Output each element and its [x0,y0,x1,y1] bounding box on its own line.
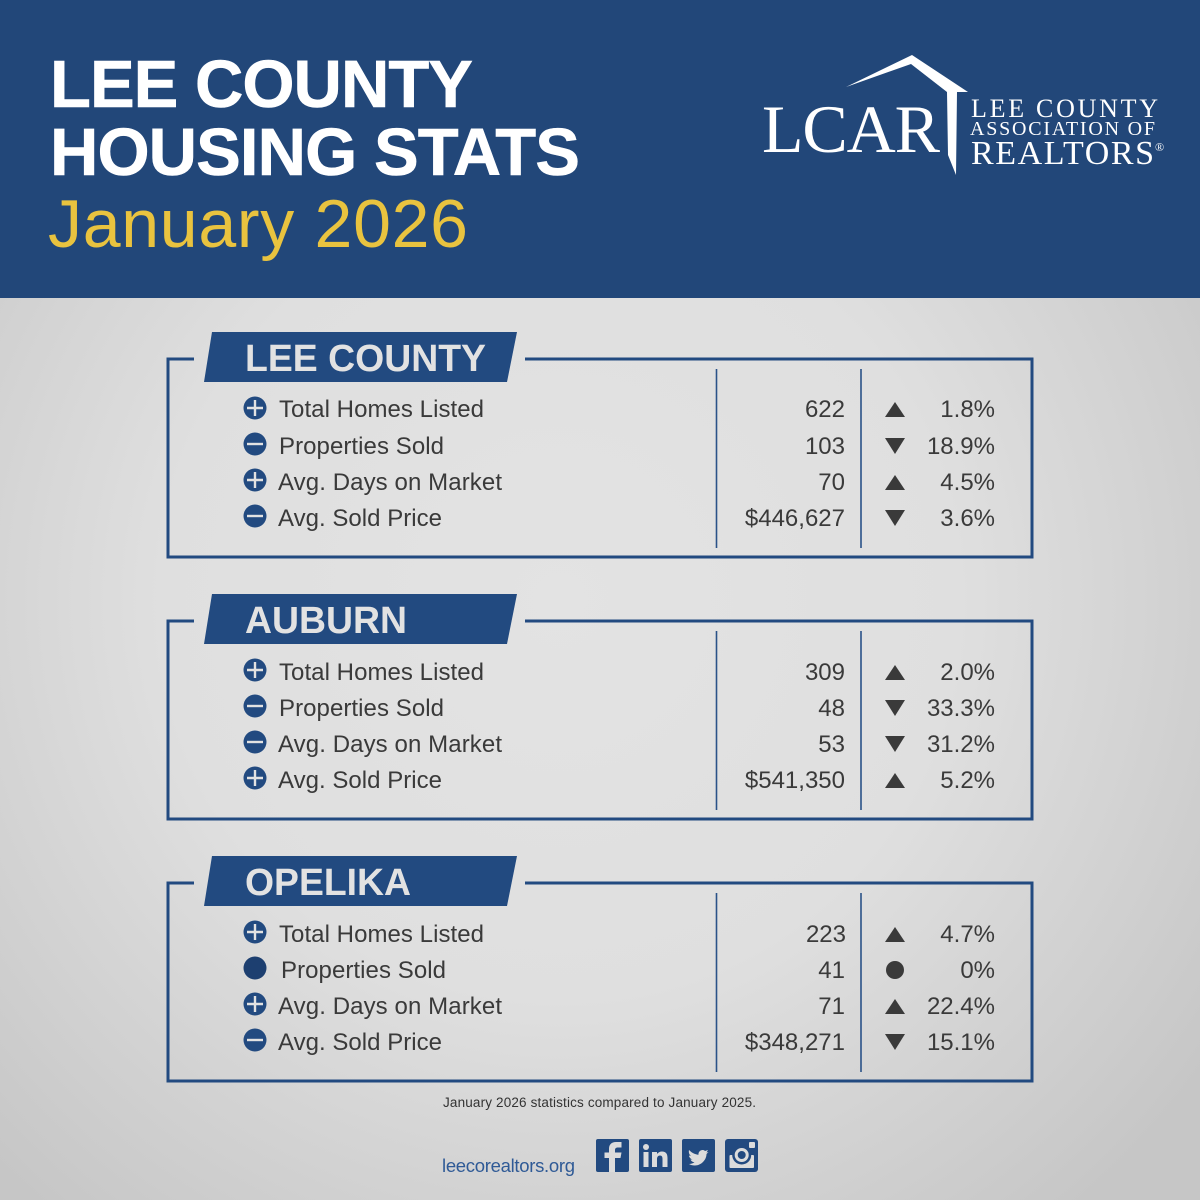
row: Total Homes Listed: 4.7% [940,921,995,948]
row: Properties Sold: Properties Sold [281,957,446,984]
heading: Lee County [204,332,517,382]
row: Properties Sold: Properties Sold [279,695,444,722]
icon: Facebook [596,1139,629,1172]
logo: LCAR: LEE COUNTY [971,94,1158,123]
heading: Lee County: LEE COUNTY [245,338,486,380]
logo: LCAR [762,55,1164,175]
row: Avg. Sold Price: $446,627 [745,505,845,532]
row: Total Homes Listed: 223 [806,921,846,948]
row: Avg. Sold Price: Avg. Sold Price [278,505,442,532]
logo: LCAR: ® [1155,140,1164,154]
row: Properties Sold: 103 [805,433,845,460]
heading: Opelika [204,856,517,906]
row: Total Homes Listed: 1.8% [940,396,995,423]
row: Avg. Sold Price: 15.1% [927,1029,995,1056]
row: Avg. Days on Market [244,730,995,758]
heading: Auburn: AUBURN [245,600,407,642]
row: Avg. Sold Price: 3.6% [940,505,995,532]
logo: LCAR: LCAR [762,91,941,167]
row: Avg. Days on Market [244,992,995,1020]
row: Avg. Days on Market: 31.2% [927,731,995,758]
row: Avg. Sold Price [244,1028,995,1056]
row: Total Homes Listed: Total Homes Listed [279,659,484,686]
heading: Opelika: OPELIKA [245,862,411,904]
icon: Twitter [682,1139,715,1172]
row: Properties Sold [244,694,995,722]
title: HOUSING STATS [50,115,580,190]
row: Total Homes Listed [244,920,995,948]
row: Avg. Days on Market: 22.4% [927,993,995,1020]
row: Total Homes Listed: Total Homes Listed [279,396,484,423]
row: Avg. Days on Market: 53 [818,731,845,758]
row: Total Homes Listed: 622 [805,396,845,423]
panel: Lee County [168,332,1032,557]
row: Avg. Days on Market: 70 [818,469,845,496]
title [48,47,580,262]
row: Properties Sold: 0% [960,957,995,984]
website link: leecorealtors.org [442,1155,575,1176]
title: January 2026 [48,186,468,262]
header band [0,0,1200,298]
icon: LinkedIn [639,1139,672,1172]
row: Avg. Days on Market: Avg. Days on Market [278,469,502,496]
row: Properties Sold: 48 [818,695,845,722]
row: Properties Sold: 41 [818,957,845,984]
panel: Opelika [168,856,1032,1081]
row: Avg. Days on Market: Avg. Days on Market [278,993,502,1020]
row: Total Homes Listed [244,396,995,423]
row: Avg. Sold Price: $348,271 [745,1029,845,1056]
row: Avg. Sold Price [244,504,995,532]
icon: Instagram [725,1139,758,1172]
row: Properties Sold: 33.3% [927,695,995,722]
row: Avg. Sold Price [244,766,995,794]
row: Avg. Sold Price: 5.2% [940,767,995,794]
row: Avg. Sold Price: Avg. Sold Price [278,1029,442,1056]
row: Total Homes Listed: 2.0% [940,659,995,686]
row: Total Homes Listed: 309 [805,659,845,686]
heading: Auburn [204,594,517,644]
row: Properties Sold [244,432,995,460]
footnote: January 2026 statistics compared to January 2025. [443,1095,756,1110]
row: Avg. Sold Price: Avg. Sold Price [278,767,442,794]
row: Total Homes Listed [244,658,995,686]
row: Avg. Days on Market: 71 [818,993,845,1020]
row: Avg. Days on Market: 4.5% [940,469,995,496]
logo: LCAR: ASSOCIATION OF [970,118,1155,140]
row: Avg. Days on Market: Avg. Days on Market [278,731,502,758]
logo: LCAR: REALTORS [971,135,1154,172]
title: LEE COUNTY [50,47,473,122]
row: Properties Sold: 18.9% [927,433,995,460]
row: Avg. Days on Market [244,468,995,496]
row: Properties Sold [244,956,995,984]
row: Total Homes Listed: Total Homes Listed [279,921,484,948]
row: Properties Sold: Properties Sold [279,433,444,460]
row: Avg. Sold Price: $541,350 [745,767,845,794]
panel: Auburn [168,594,1032,819]
